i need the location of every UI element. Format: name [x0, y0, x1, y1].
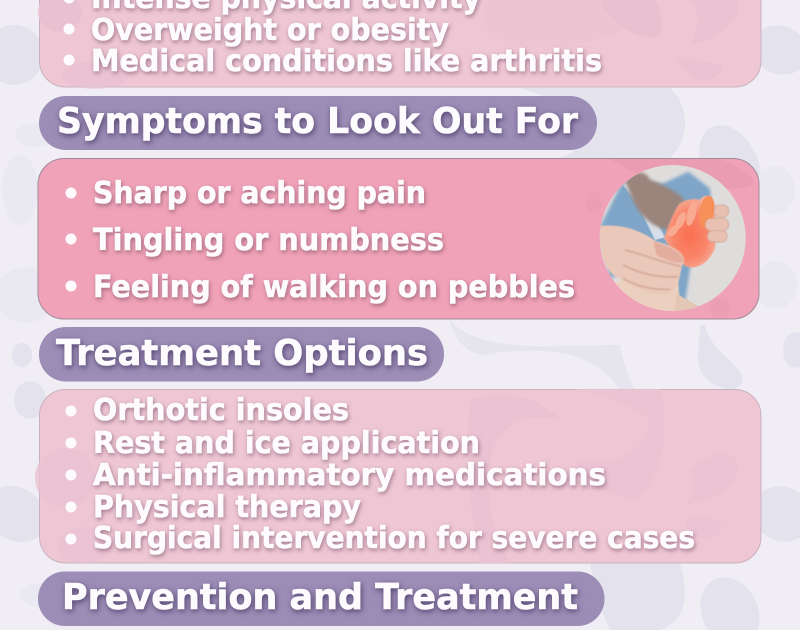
- photo: hands holding red painful foot: [599, 165, 747, 315]
- bullet: sharp pain: [66, 188, 76, 198]
- forearm: [625, 172, 685, 230]
- bullet: anti-inflammatory: [66, 470, 76, 480]
- heading: treatment options: Treatment Options: [56, 333, 428, 374]
- text: anti-inflammatory: Anti-inflammatory medications: [93, 458, 606, 493]
- foot sole: [664, 196, 716, 267]
- heading: symptoms to look out for: Symptoms to Look Out For: [57, 101, 578, 142]
- panel pattern: causes: [38, 0, 738, 89]
- bullet: overweight or obesity: [64, 24, 74, 34]
- text: sharp pain: Sharp or aching pain: [93, 176, 426, 211]
- shirt: [600, 172, 712, 303]
- bullet: surgical: [66, 534, 76, 544]
- panel pattern: symptoms: [586, 159, 753, 318]
- bullet: tingling: [66, 234, 76, 244]
- toes shading: [668, 196, 714, 236]
- panel pattern: treatment: [35, 389, 738, 563]
- text: medical conditions: Medical conditions like arthritis: [91, 44, 602, 79]
- bullet: physical therapy: [66, 502, 76, 512]
- bullet: orthotic: [66, 406, 76, 416]
- ankle: [616, 280, 680, 311]
- panel: treatment options: [35, 389, 761, 563]
- finger shading: [623, 250, 682, 289]
- panel: symptoms: [38, 158, 759, 319]
- bullet: rest: [66, 438, 76, 448]
- holding hand: [600, 224, 684, 284]
- bullet: pebbles: [66, 280, 76, 292]
- text: pebbles: Feeling of walking on pebbles: [93, 270, 575, 305]
- text: surgical: Surgical intervention for severe cases: [93, 521, 695, 556]
- panel: causes list: [38, 0, 761, 89]
- text: orthotic: Orthotic insoles: [93, 393, 349, 428]
- bullet: medical conditions: [64, 54, 74, 66]
- list: treatments: [66, 393, 695, 556]
- supporting fingers: [705, 205, 729, 242]
- text: tingling: Tingling or numbness: [93, 223, 444, 258]
- bullet: intense physical activity: [64, 0, 74, 4]
- text: overweight or obesity: Overweight or obesity: [91, 13, 449, 48]
- text: rest: Rest and ice application: [93, 426, 480, 461]
- heading: prevention and treatment: Prevention and Treatment: [62, 577, 578, 618]
- collar: [623, 182, 665, 240]
- text: physical therapy: Physical therapy: [93, 490, 361, 525]
